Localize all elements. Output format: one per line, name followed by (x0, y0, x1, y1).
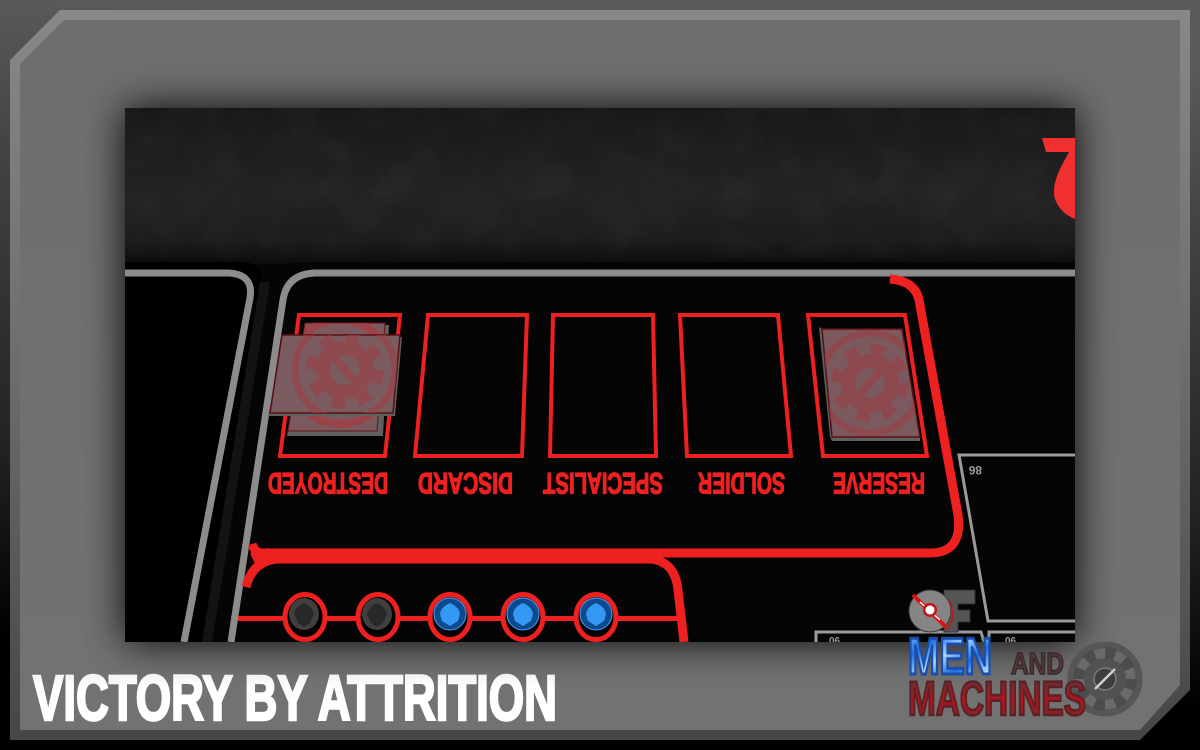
logo (908, 590, 1139, 726)
lower card zones: 90 (1004, 634, 1016, 645)
main panel outline (231, 273, 1075, 642)
slot: destroyed: DESTROYED (268, 466, 388, 499)
token: active 3 (576, 594, 616, 640)
slot: discard (415, 315, 527, 499)
slot: specialist: SPECIALIST (543, 466, 663, 499)
slot: destroyed (268, 315, 400, 499)
red panel junction (250, 548, 276, 564)
slot: specialist (543, 315, 663, 499)
token: spent 2 (358, 594, 398, 640)
token track line (238, 616, 680, 621)
stone texture strip (125, 108, 1075, 264)
token: active 1 (430, 594, 470, 640)
logo: MEN wordmark: MEN (908, 628, 992, 686)
slot: soldier (680, 315, 791, 499)
red lower panel border (246, 559, 684, 642)
logo: AND wordmark: AND (1011, 646, 1064, 681)
left panel outline (125, 273, 251, 642)
gap strip (202, 282, 270, 642)
black panel surrounds (125, 262, 252, 264)
slot: soldier: SOLDIER (698, 466, 785, 499)
lower card zones: 90 (828, 634, 840, 645)
logo: MACHINES wordmark: MACHINES (908, 673, 1086, 726)
destroyed front card (268, 334, 402, 416)
logo: OF emblem (909, 590, 975, 632)
token: spent 1 (285, 594, 325, 640)
grey card zone: 86 (968, 463, 982, 477)
red board numeral (1042, 138, 1075, 219)
logo: gear emblem (1071, 645, 1139, 713)
game board photo (125, 108, 1075, 645)
lower card zones (814, 630, 1075, 642)
destroyed rear card (287, 320, 392, 436)
grey card zone (959, 455, 1075, 621)
slot: reserve (808, 315, 927, 499)
slot: reserve: RESERVE (833, 466, 925, 499)
token: active 2 (503, 594, 543, 640)
red main panel border (252, 279, 959, 553)
reserve card (819, 327, 920, 441)
title: VICTORY BY ATTRITION (33, 662, 557, 734)
slot: discard: DISCARD (418, 466, 513, 499)
